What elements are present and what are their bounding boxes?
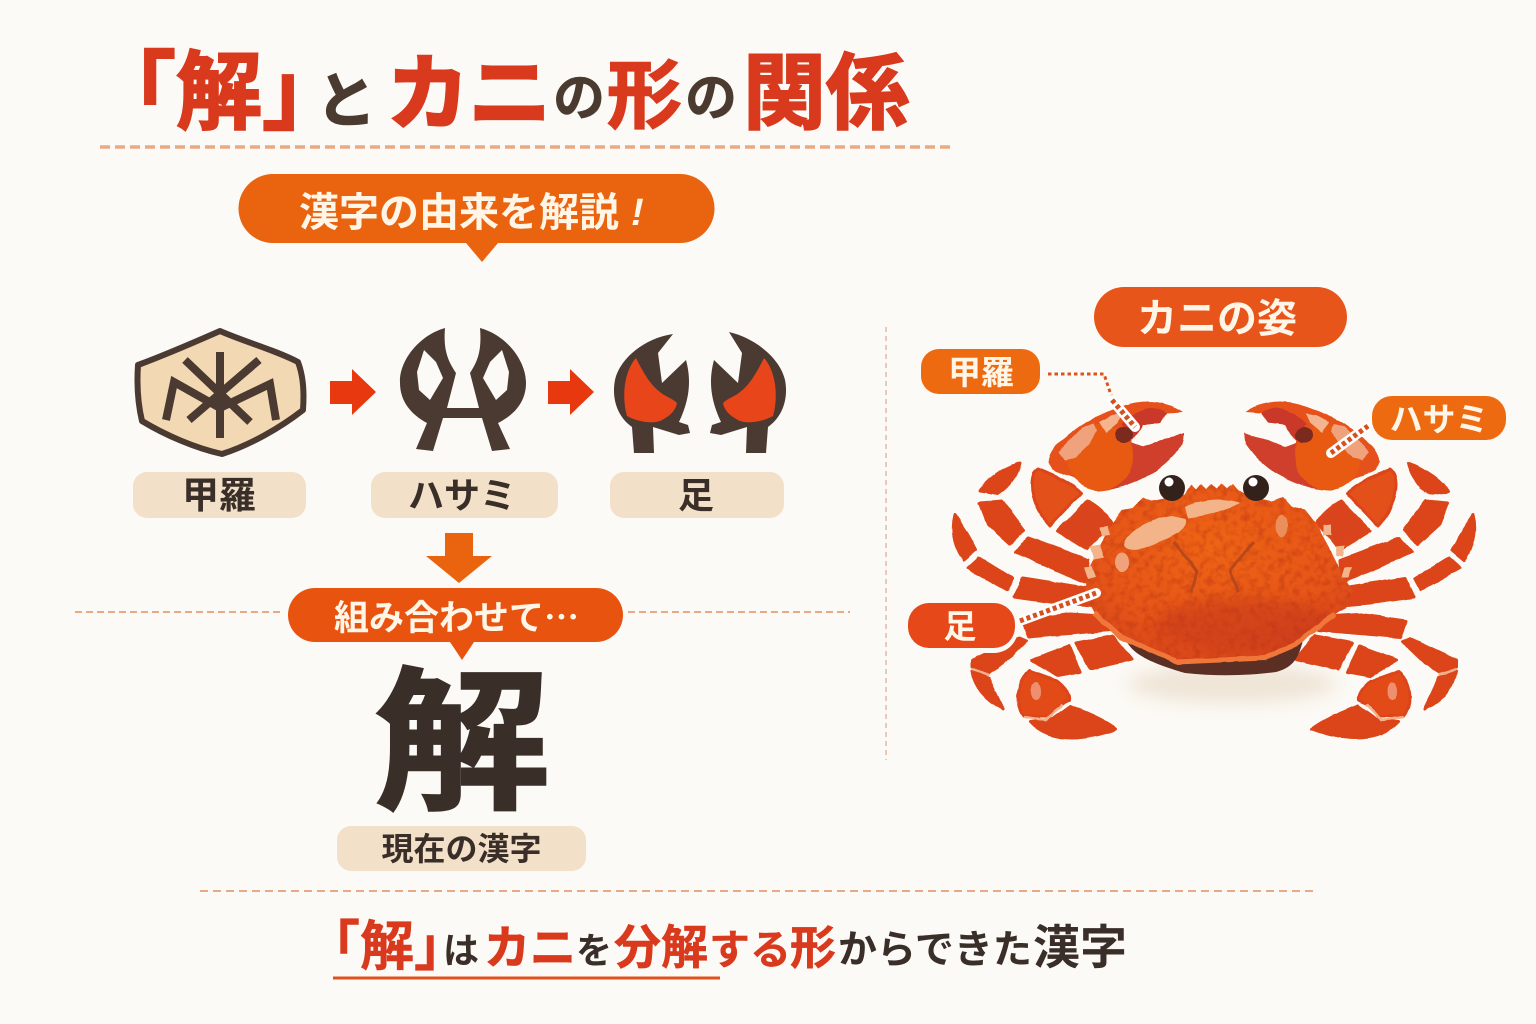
title bbox=[90, 45, 909, 141]
crab underbelly bbox=[1125, 638, 1303, 675]
large kanji: 解 bbox=[374, 658, 550, 831]
title: カニ bbox=[387, 49, 551, 140]
conclusion text: 漢字 bbox=[1033, 921, 1127, 974]
speech bubble: combine: 組み合わせて… bbox=[334, 590, 579, 641]
crab shell bbox=[1084, 484, 1353, 664]
title: 関係 bbox=[743, 47, 909, 140]
speech bubble: kanji origin bbox=[238, 174, 715, 262]
callout: leg: 足 bbox=[944, 608, 976, 645]
title: の bbox=[685, 70, 737, 128]
title: 「解」 bbox=[90, 45, 348, 141]
label: current kanji bbox=[337, 826, 586, 871]
conclusion text: 形 bbox=[790, 922, 836, 974]
crab eyes bbox=[1159, 475, 1269, 501]
callout: shell bbox=[921, 349, 1135, 427]
crab heading: カニの姿 bbox=[1137, 297, 1297, 341]
title: と bbox=[316, 68, 376, 135]
conclusion text: からできた bbox=[838, 929, 1032, 972]
title: 形 bbox=[607, 54, 682, 138]
title: の bbox=[553, 70, 605, 128]
conclusion text bbox=[306, 917, 1127, 977]
speech bubble: kanji origin: ! bbox=[631, 192, 644, 234]
arrow: shell to claw bbox=[330, 369, 376, 415]
callout: leg bbox=[905, 593, 1096, 653]
icon: shell glyph bbox=[137, 331, 303, 454]
conclusion text: カニ bbox=[484, 922, 576, 974]
icon: leg glyph bbox=[614, 332, 786, 453]
conclusion text: 分解 bbox=[614, 921, 708, 974]
label: leg: 足 bbox=[678, 475, 714, 516]
crab heading bbox=[1094, 287, 1347, 347]
speech bubble: kanji origin: 漢字の由来を解説 bbox=[299, 191, 619, 235]
crab illustration bbox=[953, 401, 1475, 738]
label: claw: ハサミ bbox=[408, 475, 516, 516]
callout: claw bbox=[1331, 396, 1506, 453]
callout: claw: ハサミ bbox=[1390, 401, 1488, 438]
callout: shell: 甲羅 bbox=[948, 354, 1014, 391]
label: shell bbox=[133, 472, 306, 518]
conclusion text: する bbox=[709, 927, 791, 973]
conclusion text: を bbox=[576, 930, 612, 971]
label: current kanji: 現在の漢字 bbox=[381, 831, 542, 867]
arrow: claw to legs bbox=[548, 369, 594, 415]
conclusion text: 「解」 bbox=[306, 917, 468, 977]
conclusion text: は bbox=[443, 930, 479, 971]
crab shadow bbox=[1127, 664, 1337, 704]
speech bubble: combine bbox=[288, 588, 623, 660]
label: shell: 甲羅 bbox=[182, 475, 256, 516]
kanji parts row bbox=[133, 328, 786, 518]
arrow: down bbox=[426, 533, 492, 583]
label: claw bbox=[371, 472, 558, 518]
underline bbox=[333, 976, 720, 980]
icon: claw glyph bbox=[400, 328, 526, 451]
crab limbs and claws bbox=[953, 401, 1475, 738]
label: leg bbox=[610, 472, 784, 518]
